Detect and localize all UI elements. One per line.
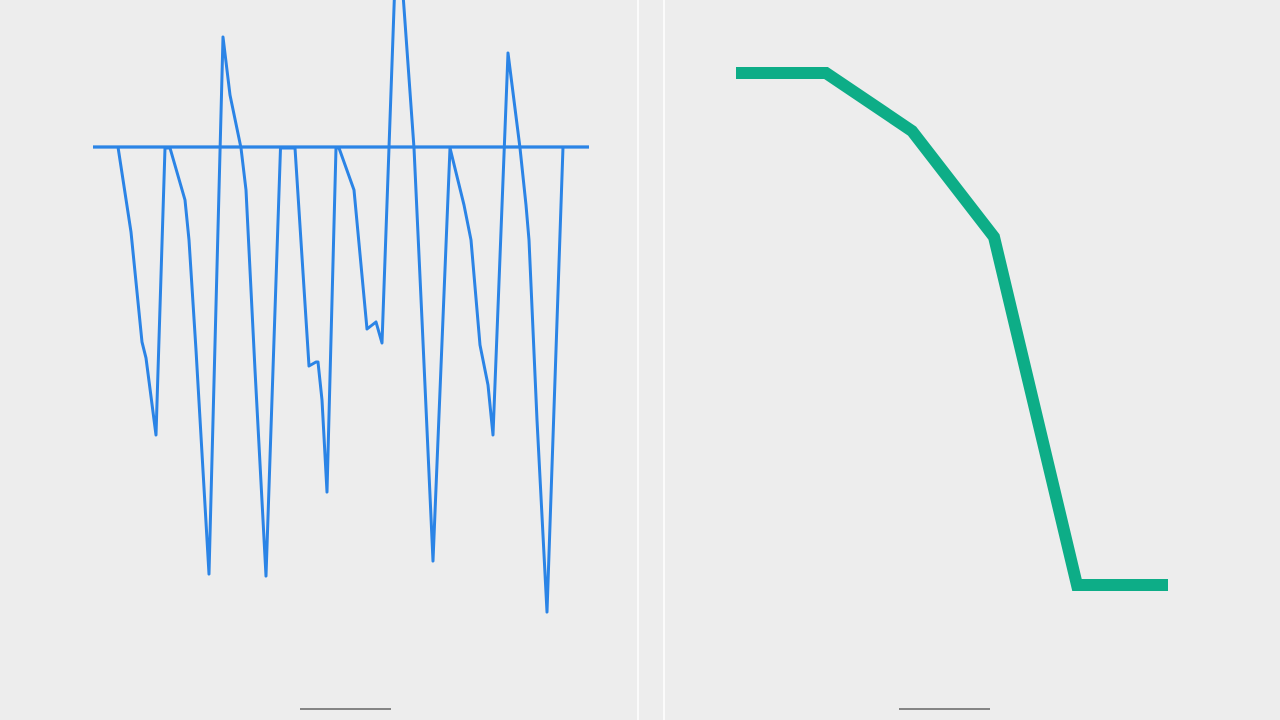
green declining line bbox=[736, 73, 1168, 585]
blue spiky line bbox=[118, 0, 563, 612]
axis tick mark bbox=[300, 708, 391, 710]
panel: blue volatile line chart bbox=[93, 0, 589, 709]
axis tick mark bbox=[899, 708, 990, 710]
panel: green decline line chart bbox=[736, 73, 1168, 709]
baseline bbox=[93, 145, 589, 149]
